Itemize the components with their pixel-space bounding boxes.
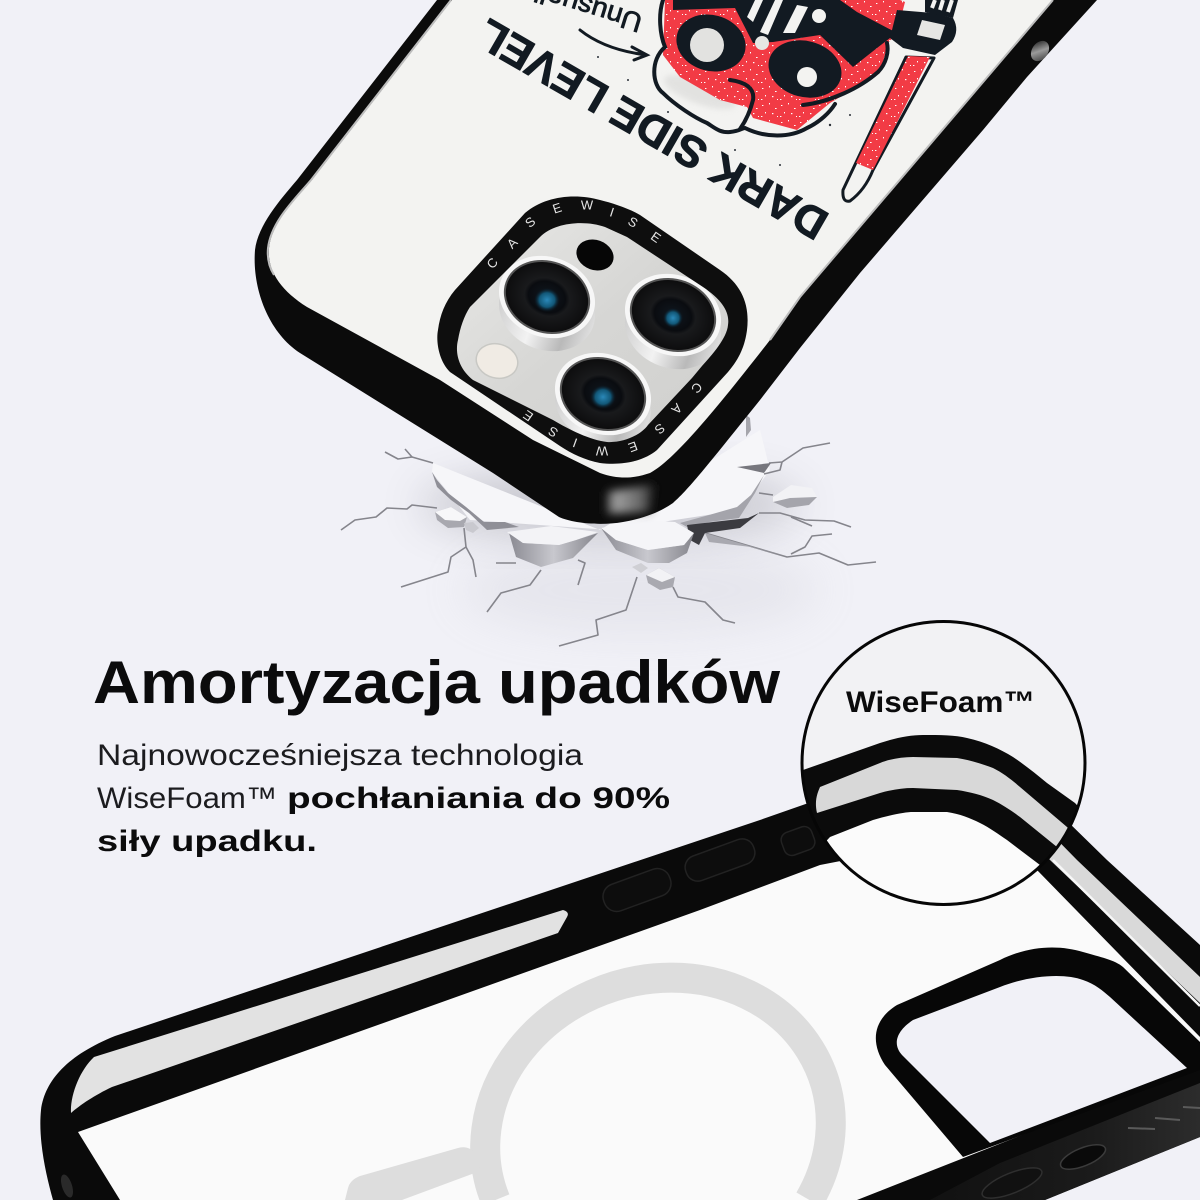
lens 1 xyxy=(487,243,607,364)
body text: WiseFoam™ xyxy=(97,782,277,815)
artwork: arrow xyxy=(580,30,647,60)
camera ring lettering bottom: E xyxy=(626,438,640,455)
camera ring lettering top: A xyxy=(504,235,521,251)
camera ring lettering bottom: S xyxy=(545,423,561,441)
artwork: dark side level: DARK SIDE LEVEL xyxy=(469,9,836,249)
bottom edge band xyxy=(930,1083,1200,1200)
body text: pochłaniania do 90% xyxy=(287,782,670,815)
camera ring lettering bottom xyxy=(520,379,706,458)
camera ring lettering top: E xyxy=(551,200,564,217)
camera ring lettering top: C xyxy=(483,255,501,272)
phone bumper black frame xyxy=(255,0,1097,524)
microphone hole xyxy=(572,234,618,276)
magnifier ring xyxy=(802,622,1085,904)
edge switch xyxy=(979,1162,1045,1200)
bottom case, inner view xyxy=(40,750,1200,1200)
magnetic ring xyxy=(485,978,831,1200)
phone white back xyxy=(269,0,1053,478)
side buttons xyxy=(599,824,817,915)
camera ring lettering bottom: E xyxy=(520,407,536,424)
top phone with case xyxy=(255,0,1097,524)
lens 3 xyxy=(543,340,663,457)
body text: Najnowocześniejsza technologia xyxy=(97,739,583,772)
clear back panel xyxy=(78,830,1200,1200)
foam strip highlight xyxy=(1053,860,1200,1006)
camera cutout frame xyxy=(876,947,1200,1157)
camera ring lettering top: I xyxy=(608,204,616,220)
camera ring lettering bottom: A xyxy=(668,401,685,417)
body text: siły upadku. xyxy=(97,825,317,858)
edge texture ticks xyxy=(1128,1107,1200,1129)
camera ring lettering top: E xyxy=(648,229,664,246)
camera ring lettering bottom: W xyxy=(595,443,608,458)
camera ring lettering top xyxy=(483,198,664,272)
magnified foam detail xyxy=(804,735,1077,868)
camera ring lettering bottom: C xyxy=(688,379,706,396)
cracked floor impact xyxy=(341,415,876,646)
edge reflections xyxy=(268,0,1053,340)
flash xyxy=(472,339,522,383)
magnifier label: WiseFoam™ xyxy=(846,686,1035,719)
magnetic alignment pill xyxy=(345,1147,480,1200)
left foam strip xyxy=(71,910,568,1113)
body text xyxy=(97,739,670,858)
camera ring lettering bottom: S xyxy=(651,420,668,438)
side button highlight xyxy=(1027,37,1053,65)
edge speaker port xyxy=(1057,1140,1109,1174)
camera ring lettering top: S xyxy=(625,213,641,231)
camera ring lettering top: S xyxy=(522,213,539,231)
camera cutout opening xyxy=(897,976,1187,1143)
bumper corner highlight xyxy=(605,484,656,514)
lens 2 xyxy=(613,261,733,382)
camera ring lettering top: W xyxy=(581,198,594,213)
left side port xyxy=(59,1173,75,1199)
case black frame xyxy=(40,750,1200,1200)
camera ring lettering bottom: I xyxy=(571,435,579,450)
right foam strip xyxy=(1010,812,1200,1003)
camera surround ring xyxy=(437,196,748,464)
WiseFoam magnifier xyxy=(800,620,1086,906)
heading: Amortyzacja upadków xyxy=(93,649,780,716)
artwork: cat character xyxy=(597,0,958,201)
camera island xyxy=(437,196,748,464)
